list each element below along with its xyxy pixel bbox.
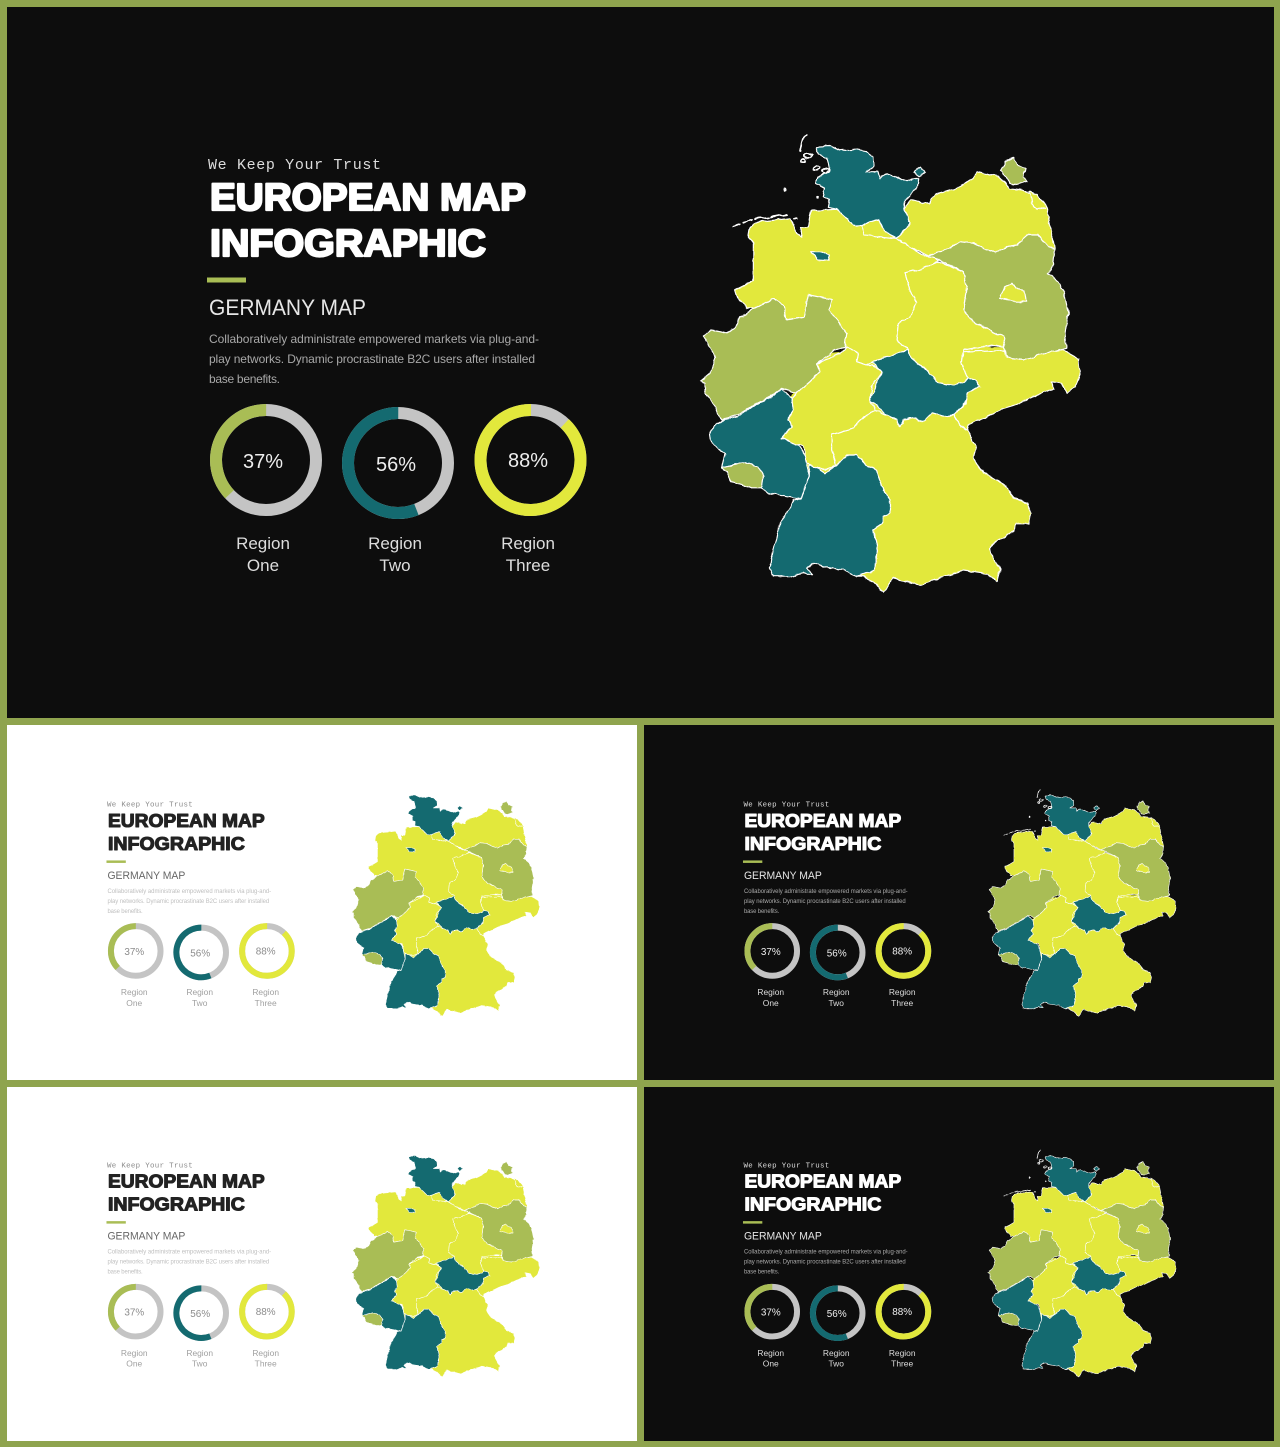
state: Bavaria: [832, 410, 1031, 592]
eyebrow text: We Keep Your Trust: [107, 1162, 193, 1170]
island: Usedom: [1030, 192, 1047, 210]
heading: [108, 1171, 265, 1214]
island: Fehmarn: [914, 167, 926, 176]
donut: region one 37%: Region: [236, 534, 290, 553]
subheading: GERMANY MAP: [107, 1231, 185, 1243]
body text: Collaboratively administrate empowered markets via plug-and-: [107, 889, 271, 895]
panel: white top left: [7, 725, 637, 1080]
donut: region three 88%: 88%: [256, 946, 276, 957]
Hamburg area boundary: [862, 227, 897, 238]
map: Germany: [351, 789, 539, 1016]
donut: region three 88%: [868, 916, 938, 1008]
donut: region one 37%: 37%: [243, 451, 283, 473]
donut: region three 88%: Region: [252, 1348, 279, 1358]
subheading: GERMANY MAP: [744, 1231, 822, 1243]
accent bar: [106, 1221, 126, 1224]
donut: region three 88%: [232, 1277, 302, 1369]
donut: region one 37%: Region: [757, 1348, 784, 1358]
map: Germany: [987, 1150, 1176, 1377]
body text: Collaboratively administrate empowered markets via plug-and-: [209, 332, 539, 346]
donut: region two 56%: 56%: [827, 1309, 847, 1320]
state: Schleswig-Holstein: [816, 146, 918, 238]
subheading: GERMANY MAP: [209, 295, 366, 320]
donut: region one 37%: 37%: [124, 1308, 144, 1319]
donut: region two 56%: Two: [828, 1359, 844, 1369]
subheading: GERMANY MAP: [744, 870, 822, 882]
state: Saxony-Anhalt: [897, 262, 1005, 385]
accent bar: [207, 278, 246, 282]
panel: white bottom left: [7, 1087, 637, 1441]
donut: region three 88%: 88%: [508, 450, 548, 472]
donut: region one 37%: [195, 389, 337, 575]
panel: dark bottom right: [644, 1087, 1274, 1441]
donut: region two 56%: [169, 920, 233, 1008]
islands: North Sea coast: [733, 134, 830, 227]
donut: region one 37%: [101, 916, 171, 1008]
body text: [744, 1250, 908, 1275]
body text: play networks. Dynamic procrastinate B2C users after installed: [744, 899, 906, 905]
donut: region three 88%: [232, 916, 302, 1008]
heading: [108, 810, 265, 854]
donut: region three 88%: 88%: [892, 1307, 912, 1318]
body text: play networks. Dynamic procrastinate B2C users after installed: [744, 1260, 906, 1266]
state: Thuringia: [870, 350, 980, 427]
accent bar: [743, 1221, 762, 1224]
donut: region two 56%: [169, 1281, 233, 1369]
donut: region two 56%: 56%: [190, 1309, 210, 1320]
body text: [744, 889, 908, 915]
heading: INFOGRAPHIC: [744, 833, 882, 854]
donut: region one 37%: Region: [121, 987, 148, 997]
donut: region three 88%: Region: [889, 987, 916, 997]
state: Saxony: [953, 350, 1080, 430]
donut: region two 56%: Region: [823, 1348, 850, 1358]
donut: region one 37%: One: [763, 1359, 779, 1369]
donut: region two 56%: Two: [192, 998, 208, 1008]
donut: region two 56%: Region: [186, 1348, 213, 1358]
body text: Collaboratively administrate empowered markets via plug-and-: [744, 1250, 908, 1256]
donut: region one 37%: One: [247, 556, 279, 575]
body text: play networks. Dynamic procrastinate B2C users after installed: [107, 899, 269, 905]
state: Bremen: [812, 252, 830, 261]
donut: region three 88%: Region: [889, 1348, 916, 1358]
heading: INFOGRAPHIC: [108, 1193, 245, 1214]
body text: play networks. Dynamic procrastinate B2C users after installed: [107, 1260, 269, 1266]
donut: region one 37%: One: [126, 998, 143, 1008]
state: Hesse: [782, 347, 882, 470]
map: Germany: [987, 789, 1176, 1016]
body text: base benefits.: [107, 909, 143, 915]
donut: region three 88%: Three: [506, 556, 550, 575]
donut: region one 37%: Region: [121, 1348, 148, 1358]
body text: base benefits.: [744, 1269, 780, 1275]
donut: region three 88%: Region: [501, 534, 555, 553]
donut: region one 37%: 37%: [761, 1308, 781, 1319]
heading: INFOGRAPHIC: [210, 223, 486, 265]
donut: region one 37%: One: [763, 998, 779, 1008]
state: Saarland: [722, 462, 763, 488]
state: Mecklenburg-Vorpommern: [897, 172, 1055, 256]
heading: EUROPEAN MAP: [744, 1171, 901, 1192]
heading: [744, 810, 901, 854]
state: Berlin: [1000, 283, 1027, 302]
heading: EUROPEAN MAP: [210, 177, 526, 219]
donut: region one 37%: Region: [757, 987, 784, 997]
donut: region two 56%: [333, 398, 463, 575]
donut: region three 88%: [868, 1277, 938, 1369]
map: Germany: [351, 1150, 539, 1377]
donut: region one 37%: 37%: [761, 947, 781, 958]
donut: region three 88%: Three: [255, 1359, 277, 1369]
state: Brandenburg: [928, 235, 1068, 360]
donut: region three 88%: Three: [891, 998, 913, 1008]
heading: INFOGRAPHIC: [744, 1193, 882, 1214]
body text: [107, 889, 271, 915]
heading: EUROPEAN MAP: [108, 1171, 265, 1192]
body text: [209, 332, 539, 386]
heading: [744, 1171, 901, 1214]
state: Lower Saxony: [735, 209, 938, 365]
donut: region three 88%: [460, 389, 601, 575]
eyebrow text: We Keep Your Trust: [208, 157, 381, 174]
body text: base benefits.: [107, 1269, 143, 1275]
donut: region three 88%: Three: [891, 1359, 913, 1369]
donut: region three 88%: Region: [252, 987, 279, 997]
body text: base benefits.: [744, 909, 780, 915]
donut: region three 88%: Three: [255, 998, 277, 1008]
body text: [107, 1250, 271, 1275]
donut: region two 56%: 56%: [827, 948, 847, 959]
donut: region one 37%: One: [126, 1359, 143, 1369]
donut: region two 56%: Region: [186, 987, 213, 997]
accent bar: [743, 860, 762, 863]
donut: region one 37%: [101, 1277, 171, 1369]
eyebrow text: We Keep Your Trust: [107, 802, 193, 810]
donut: region three 88%: 88%: [892, 946, 912, 957]
body text: base benefits.: [209, 372, 280, 386]
heading: [210, 177, 526, 265]
donut: region two 56%: Two: [828, 998, 844, 1008]
donut: region two 56%: 56%: [376, 454, 416, 476]
map base fill: [790, 347, 1043, 487]
eyebrow text: We Keep Your Trust: [743, 802, 829, 810]
state: Rhineland-Palatinate: [710, 389, 809, 498]
state: North Rhine-Westphalia: [700, 295, 847, 420]
body text: Collaboratively administrate empowered markets via plug-and-: [107, 1250, 271, 1256]
panel: large dark: [7, 7, 1274, 718]
donut: region two 56%: [806, 1281, 870, 1369]
donut: region two 56%: [806, 920, 870, 1008]
body text: Collaboratively administrate empowered markets via plug-and-: [744, 889, 908, 895]
eyebrow text: We Keep Your Trust: [743, 1162, 829, 1170]
donut: region one 37%: [737, 1277, 807, 1369]
state: Baden-Wuerttemberg: [769, 455, 890, 577]
donut: region three 88%: 88%: [256, 1307, 276, 1318]
donut: region two 56%: Two: [192, 1359, 208, 1369]
donut: region one 37%: [737, 916, 807, 1008]
donut: region two 56%: Region: [823, 987, 850, 997]
donut: region two 56%: 56%: [190, 948, 210, 959]
heading: EUROPEAN MAP: [744, 810, 901, 831]
map: Germany: [700, 134, 1080, 592]
heading: EUROPEAN MAP: [108, 810, 265, 831]
accent bar: [106, 860, 126, 863]
heading: INFOGRAPHIC: [108, 833, 245, 854]
island: Ruegen: [1000, 158, 1027, 185]
body text: play networks. Dynamic procrastinate B2C users after installed: [209, 352, 535, 366]
donut: region one 37%: 37%: [124, 947, 144, 958]
donut: region two 56%: Region: [368, 534, 422, 553]
panel: dark top right: [644, 725, 1274, 1080]
donut: region two 56%: Two: [379, 556, 411, 575]
subheading: GERMANY MAP: [107, 870, 185, 882]
